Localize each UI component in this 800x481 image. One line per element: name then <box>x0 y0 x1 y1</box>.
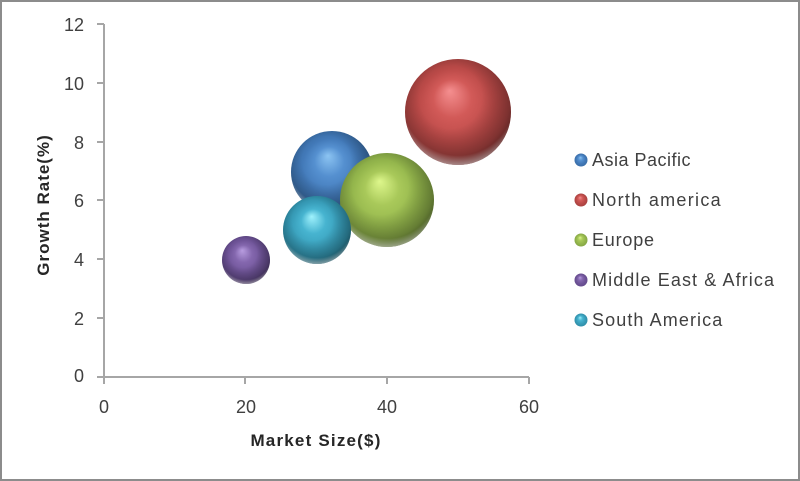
y axis labels: 2 <box>74 309 84 329</box>
y axis labels: 12 <box>64 15 84 35</box>
bubble: North america <box>405 59 511 165</box>
legend <box>574 150 775 330</box>
bubble: Asia Pacific <box>291 131 373 213</box>
x axis ticks <box>245 377 529 384</box>
y axis <box>97 24 529 384</box>
bubble: South America <box>283 196 351 264</box>
y axis title: Growth Rate(%) <box>34 134 53 276</box>
x axis labels: 0 <box>99 397 109 417</box>
x axis labels <box>99 397 539 417</box>
legend item: Europe: Europe <box>592 230 655 250</box>
x axis labels: 20 <box>236 397 256 417</box>
legend item: North america: North america <box>592 190 722 210</box>
y axis labels: 6 <box>74 191 84 211</box>
y axis labels <box>64 15 84 386</box>
legend item: Asia Pacific: Asia Pacific <box>592 150 691 170</box>
legend item: Middle East & Africa: Middle East & Africa <box>592 270 775 290</box>
bubble: Europe <box>340 153 434 247</box>
y axis labels: 0 <box>74 366 84 386</box>
legend item: South America: South America <box>592 310 723 330</box>
x axis labels: 60 <box>519 397 539 417</box>
y axis labels: 8 <box>74 133 84 153</box>
x axis labels: 40 <box>377 397 397 417</box>
bubble: Middle East & Africa <box>222 236 270 284</box>
x axis title: Market Size($) <box>250 431 382 450</box>
y axis labels: 10 <box>64 74 84 94</box>
y axis labels: 4 <box>74 250 84 270</box>
